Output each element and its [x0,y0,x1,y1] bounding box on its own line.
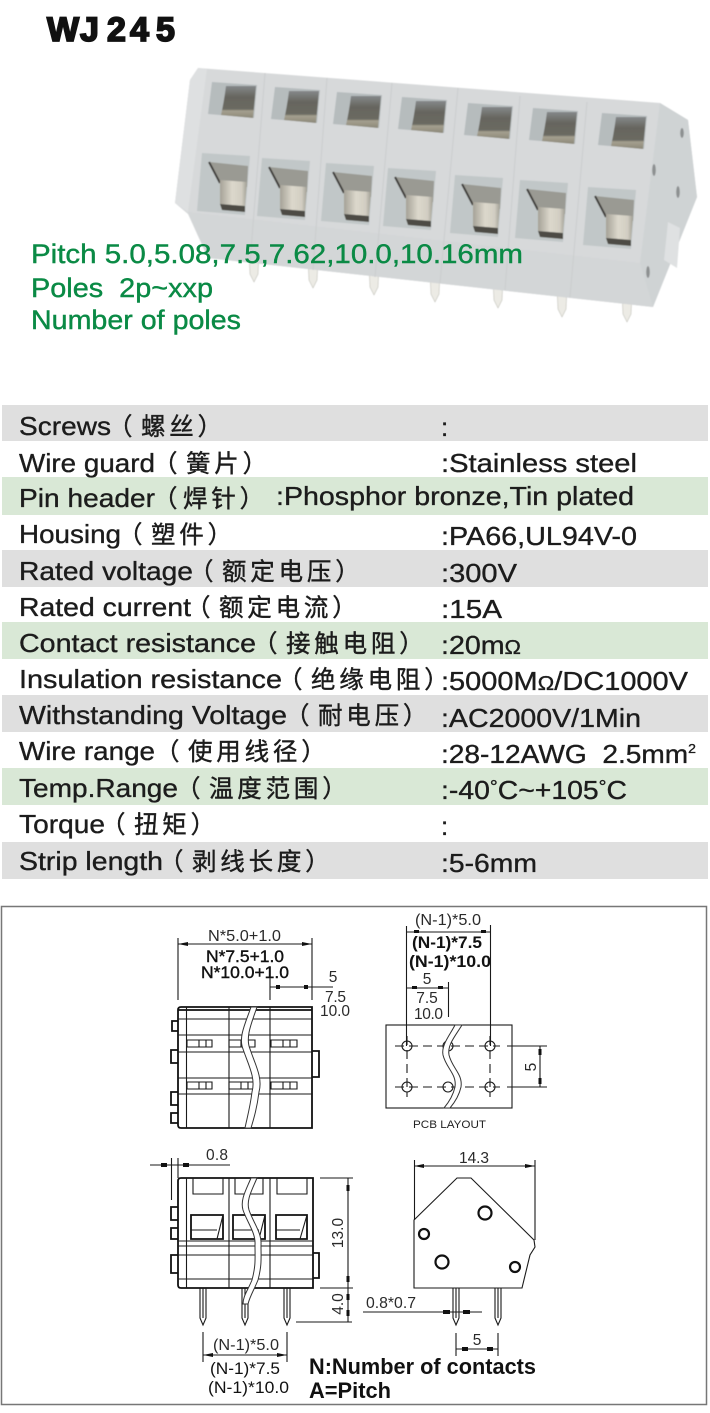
specification table: :Phosphor bronze,Tin plated [276,481,634,511]
drawing: PCB layout [386,912,547,1131]
specification table: Rated voltage [19,556,193,586]
specification table: C~+105 [498,775,599,805]
specification table: 扭矩） [134,806,219,841]
drawing: front view with dimensions: (N-1)*7.5 [210,1359,280,1378]
specification table: :28-12AWG 2.5mm [441,739,670,769]
specification table: Wire guard [19,448,155,478]
specification table: :-40 [441,775,486,805]
specification table: Torque [19,809,105,839]
specification table: （ [278,661,306,696]
specification table: :20m Ω [441,630,521,660]
specification table: :300V [441,558,518,588]
specification table: ° [599,777,607,797]
drawing: top view with dimensions: 7.5 [325,989,346,1006]
specification table: 簧片） [186,445,271,480]
specification table: （ [186,589,214,624]
specification table: : [441,412,448,442]
specification table: 焊针） [183,480,268,515]
product specifications text: Number of poles [31,305,241,335]
drawing: PCB layout: 7.5 [416,990,438,1007]
specification table: :5-6mm [441,848,537,878]
drawing: front view with dimensions: (N-1)*5.0 [213,1337,279,1354]
specification table: Wire range [19,736,155,766]
product photo: terminal block [175,68,697,322]
specification table: Temp.Range [19,773,178,803]
title: WJ245 [47,11,175,49]
specification table: （ [153,480,181,515]
specification table: 2 [688,741,696,756]
specification table: 耐电压） [318,697,431,732]
product specifications text: Poles 2p~xxp [31,273,213,303]
specification table: 温度范围） [209,770,350,805]
specification table: :PA66,UL94V-0 [441,521,637,551]
drawing: top view with dimensions: N*10.0+1.0 [201,963,289,982]
drawing: PCB layout: (N-1)*5.0 [415,912,481,929]
drawing: PCB layout: (N-1)*10.0 [409,952,491,971]
drawing: PCB layout: 5 [523,1063,540,1071]
specification table: 绝缘电阻） [311,661,452,696]
specification table: （ [153,445,181,480]
legend notes [309,1354,536,1403]
specification table: Insulation resistance [19,664,282,694]
product specifications text: Pitch 5.0,5.08,7.5,7.62,10.0,10.16mm [31,239,523,269]
drawing: PCB layout: (N-1)*7.5 [412,933,482,952]
specification table: （ [159,843,187,878]
drawing: top view with dimensions: 5 [329,969,337,986]
specification table: Pin header [19,483,155,513]
specification table: :15A [441,594,503,624]
drawing: front view with dimensions [150,1147,353,1397]
specification table: Contact resistance [19,628,256,658]
specification table: : [441,811,448,841]
legend notes: A=Pitch [309,1378,391,1403]
drawing: side view with dimensions: 5 [473,1332,481,1349]
specification table: （ [253,625,281,660]
drawing: top view with dimensions [171,928,350,1128]
specification table: 塑件） [151,516,236,551]
specification table: :5000M Ω/DC1000V [441,666,689,696]
specification table: Rated current [19,592,192,622]
drawing: front view with dimensions: 0.8 [206,1147,228,1164]
drawing: PCB layout: PCB LAYOUT [413,1119,486,1131]
specification table: （ [108,408,136,443]
specification table: 剥线长度） [192,843,334,878]
drawing: front view with dimensions: (N-1)*10.0 [208,1378,289,1397]
drawing: top view with dimensions: N*7.5+1.0 [206,947,284,966]
specification table: （ [285,697,313,732]
specification table: （ [189,553,217,588]
legend notes: N:Number of contacts [309,1354,536,1379]
specification table: 螺丝） [141,408,226,443]
drawing: side view with dimensions: 14.3 [459,1150,489,1167]
specification table: :Stainless steel [441,448,637,478]
drawing: front view with dimensions: 13.0 [330,1218,347,1248]
drawing: PCB layout: 5 [423,971,431,988]
specification table: 使用线径） [188,733,330,768]
specification table: Strip length [19,846,163,876]
drawing: front view with dimensions: 4.0 [330,1293,347,1315]
specification table: ° [490,777,498,797]
drawing: top view with dimensions: N*5.0+1.0 [208,928,281,945]
specification table [2,405,708,879]
specification table: Screws [19,411,111,441]
drawing: top view with dimensions: 10.0 [320,1003,350,1020]
specification table: Withstanding Voltage [19,700,287,730]
panel: technical drawings [2,906,706,1404]
specification table: 额定电压） [222,553,364,588]
specification table: C [607,775,627,805]
specification table: （ [118,516,146,551]
specification table: :AC2000V/1Min [441,703,641,733]
specification table: Housing [19,519,121,549]
specification table: （ [155,733,183,768]
specification table: 接触电阻） [286,625,428,660]
drawing: side view with dimensions [363,1150,535,1356]
specification table: （ [176,770,204,805]
specification table: （ [101,806,129,841]
specification table: 额定电流） [219,589,360,624]
product specifications text [31,239,523,335]
drawing: side view with dimensions: 0.8*0.7 [366,1295,416,1312]
drawing: PCB layout: 10.0 [414,1006,443,1023]
